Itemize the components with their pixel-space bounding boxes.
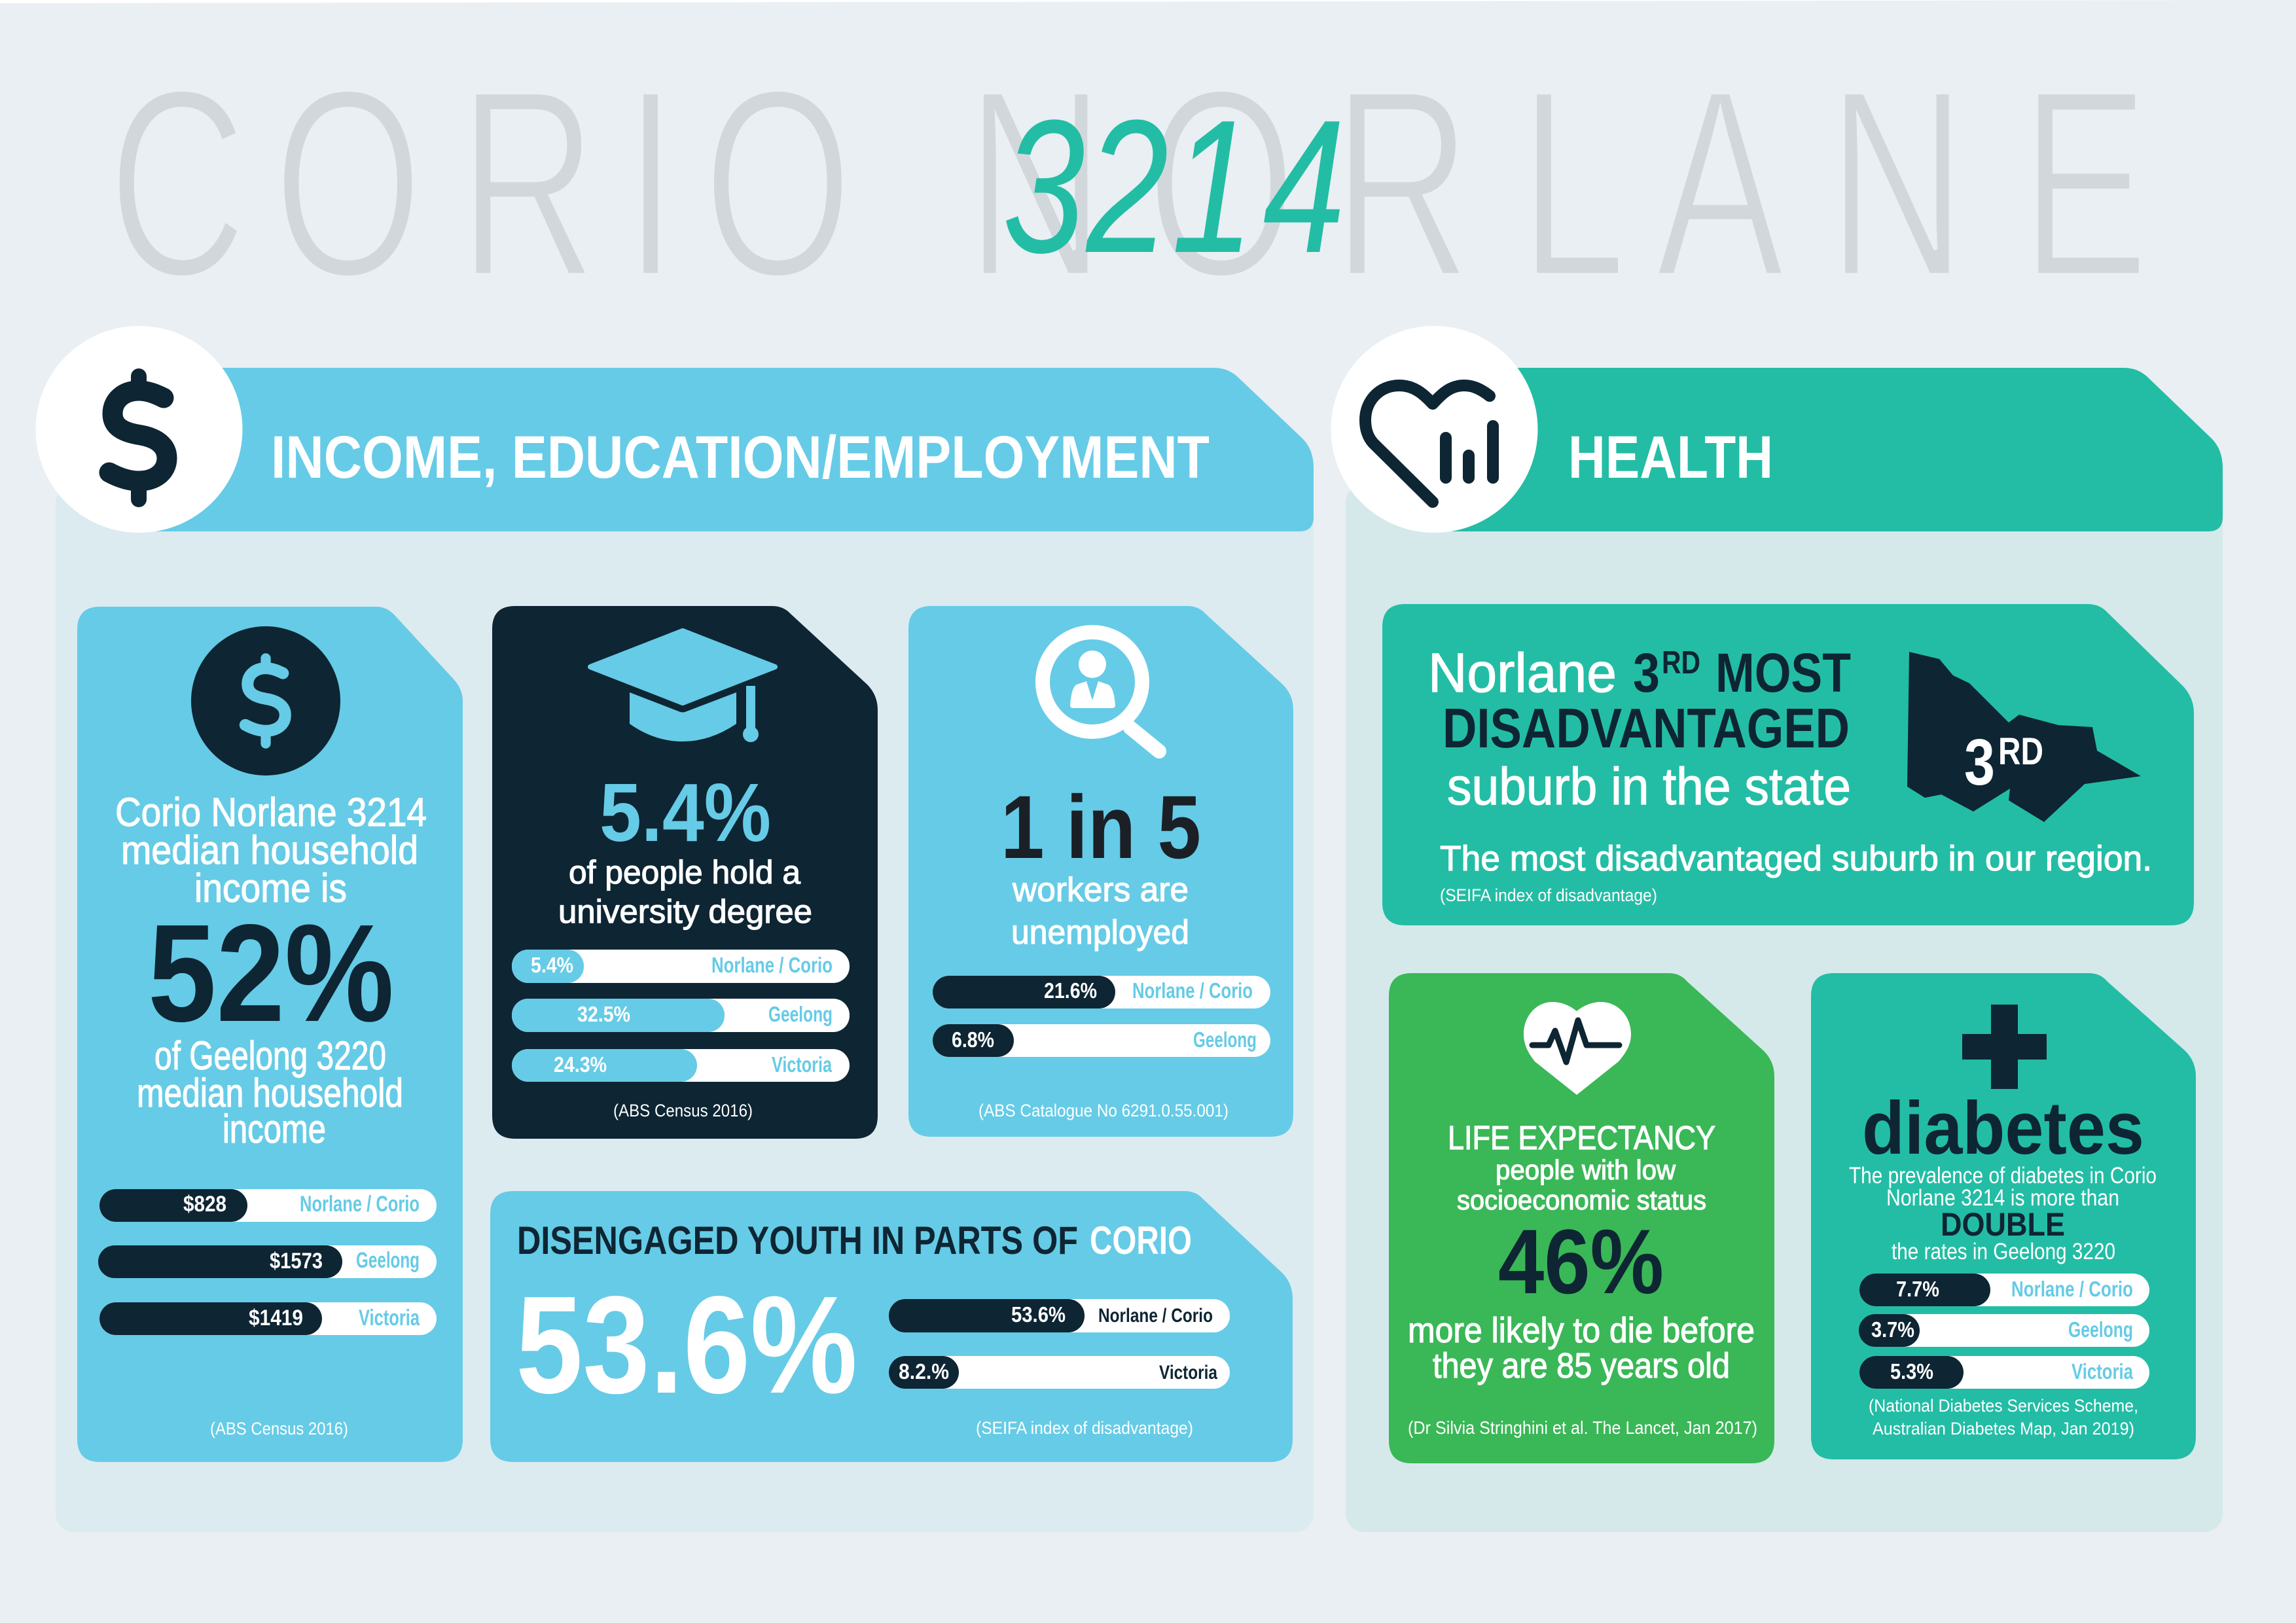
text: university degree: university degree bbox=[558, 893, 812, 930]
stat: 5.4%: 5.4% bbox=[600, 766, 771, 859]
bar chart: diabetes bbox=[1859, 1274, 2149, 1389]
icon: dollar coin bbox=[191, 626, 340, 776]
icon: graduation cap bbox=[590, 631, 775, 742]
stat: 1 in 5: 1 in 5 bbox=[1001, 777, 1201, 878]
bar chart: unemployment: 21.6% bbox=[1044, 978, 1097, 1003]
text: income comparison: of Geelong 3220 bbox=[154, 1033, 386, 1078]
bar chart: income bbox=[98, 1189, 437, 1335]
source: National Diabetes Services Scheme: (National Diabetes Services Scheme, bbox=[1869, 1396, 2138, 1416]
card: life expectancy bbox=[1389, 973, 1774, 1463]
source: National Diabetes Services Scheme: Australian Diabetes Map, Jan 2019) bbox=[1873, 1419, 2134, 1438]
source: The Lancet: (Dr Silvia Stringhini et al. The Lancet, Jan 2017) bbox=[1408, 1418, 1757, 1438]
heading: disengaged youth: CORIO bbox=[1090, 1219, 1192, 1262]
text: life expectancy intro: LIFE EXPECTANCY bbox=[1448, 1119, 1715, 1156]
bar chart: diabetes: 7.7% bbox=[1896, 1277, 1939, 1301]
heading: Norlane 3rd most disadvantaged: MOST bbox=[1715, 642, 1851, 704]
card: unemployment bbox=[908, 606, 1293, 1137]
icon: heart with bars bbox=[1331, 326, 1538, 533]
heading: Norlane 3rd most disadvantaged: DISADVANTAGED bbox=[1443, 698, 1850, 760]
icon: medical cross bbox=[1962, 1005, 2047, 1089]
bar chart: unemployment bbox=[933, 976, 1270, 1057]
map: Victoria with 3rd label: 3 bbox=[1964, 726, 1995, 799]
card: disengaged youth bbox=[490, 1191, 1293, 1462]
heading: diabetes: diabetes bbox=[1862, 1087, 2144, 1170]
card: most disadvantaged suburb bbox=[1382, 604, 2194, 925]
source: SEIFA: (SEIFA index of disadvantage) bbox=[1440, 885, 1657, 905]
text: diabetes prevalence: The prevalence of diabetes in Corio bbox=[1849, 1163, 2157, 1188]
bar chart: diabetes: 5.3% bbox=[1890, 1359, 1933, 1383]
text: diabetes prevalence: Norlane 3214 is more than bbox=[1886, 1185, 2119, 1211]
heading: Norlane 3rd most disadvantaged: Norlane bbox=[1428, 642, 1617, 704]
card: university degree bbox=[492, 606, 878, 1139]
heading: income education employment: INCOME, EDUCATION/EMPLOYMENT bbox=[271, 424, 1210, 491]
postcode 3214: 3214 bbox=[1003, 81, 1346, 293]
heading: health: HEALTH bbox=[1568, 424, 1773, 491]
stat: 46%: 46% bbox=[1498, 1210, 1664, 1313]
bar chart: degree: 32.5% bbox=[577, 1002, 630, 1026]
text: more likely to die: they are 85 years old bbox=[1433, 1346, 1730, 1385]
stat: 52%: 52% bbox=[148, 895, 394, 1050]
bar chart: disengaged youth: Victoria bbox=[1159, 1362, 1217, 1383]
bar chart: disengaged youth bbox=[889, 1299, 1230, 1389]
bar chart: degree: 24.3% bbox=[554, 1052, 607, 1077]
panel: income, education and employment bbox=[35, 326, 1314, 1532]
source: ABS Census: (ABS Census 2016) bbox=[613, 1101, 753, 1120]
bar chart: diabetes: 3.7% bbox=[1871, 1317, 1914, 1342]
stat: 53.6%: 53.6% bbox=[516, 1267, 857, 1422]
header band: health bbox=[1434, 368, 2223, 531]
bar chart: degree: Geelong bbox=[768, 1002, 833, 1026]
text: diabetes prevalence: DOUBLE bbox=[1941, 1206, 2065, 1243]
heading: disengaged youth: DISENGAGED YOUTH IN PARTS OF bbox=[517, 1219, 1078, 1262]
panel: health bbox=[1331, 326, 2223, 1532]
text: income intro bbox=[115, 790, 427, 910]
source: SEIFA: (SEIFA index of disadvantage) bbox=[976, 1418, 1193, 1438]
bar chart: unemployment: Geelong bbox=[1193, 1027, 1257, 1052]
bar chart: income: $828 bbox=[183, 1192, 226, 1217]
bar chart: diabetes: Victoria bbox=[2072, 1359, 2134, 1383]
icon: heart with pulse bbox=[1524, 1002, 1631, 1095]
text: life expectancy intro bbox=[1448, 1119, 1715, 1215]
bar chart: degree: 5.4% bbox=[531, 953, 573, 977]
heading: Norlane 3rd most disadvantaged bbox=[1428, 642, 1851, 815]
bar chart: degree bbox=[512, 950, 850, 1082]
bar chart: diabetes: Norlane / Corio bbox=[2011, 1277, 2133, 1301]
map: Victoria with 3rd label bbox=[1907, 652, 2141, 822]
bar chart: income: Norlane / Corio bbox=[300, 1192, 420, 1217]
bar chart: disengaged youth: Norlane / Corio bbox=[1098, 1305, 1213, 1327]
text: workers are unemployed: workers are bbox=[1012, 871, 1189, 909]
text: workers are unemployed: unemployed bbox=[1011, 914, 1189, 952]
title: Corio Norlane: CORIO NORLANE bbox=[108, 35, 2149, 332]
icon: magnifier with person bbox=[1043, 632, 1159, 751]
bar chart: degree: Victoria bbox=[772, 1052, 832, 1077]
text: university degree: of people hold a bbox=[569, 854, 800, 891]
heading: Norlane 3rd most disadvantaged: 3 bbox=[1633, 642, 1660, 704]
text: most disadvantaged in region: The most disadvantaged suburb in our region. bbox=[1440, 839, 2152, 878]
source: National Diabetes Services Scheme bbox=[1869, 1396, 2138, 1438]
bar chart: unemployment: Norlane / Corio bbox=[1132, 978, 1253, 1003]
text: income intro: income is bbox=[194, 866, 347, 910]
text: more likely to die bbox=[1408, 1311, 1755, 1385]
text: life expectancy intro: people with low bbox=[1496, 1154, 1676, 1185]
bar chart: income: Geelong bbox=[356, 1248, 420, 1273]
text: income comparison bbox=[137, 1033, 403, 1151]
heading: Norlane 3rd most disadvantaged: RD bbox=[1662, 645, 1700, 681]
heading: Norlane 3rd most disadvantaged: suburb in the state bbox=[1447, 757, 1851, 815]
text: income intro: Corio Norlane 3214 bbox=[115, 790, 427, 834]
text: workers are unemployed bbox=[1011, 871, 1189, 952]
text: diabetes prevalence: the rates in Geelong 3220 bbox=[1892, 1239, 2115, 1264]
text: more likely to die: more likely to die before bbox=[1408, 1311, 1755, 1350]
text: income intro: median household bbox=[121, 828, 418, 872]
bar chart: disengaged youth: 53.6% bbox=[1011, 1302, 1066, 1327]
map: Victoria with 3rd label: RD bbox=[1998, 730, 2043, 773]
text: diabetes prevalence bbox=[1849, 1163, 2157, 1264]
bar chart: degree: Norlane / Corio bbox=[711, 953, 833, 977]
text: income comparison: income bbox=[223, 1107, 326, 1151]
bar chart: unemployment: 6.8% bbox=[952, 1027, 994, 1052]
text: income comparison: median household bbox=[137, 1071, 403, 1115]
text: life expectancy intro: socioeconomic status bbox=[1457, 1185, 1706, 1215]
card: median household income bbox=[77, 607, 463, 1462]
bar chart: disengaged youth: 8.2.% bbox=[899, 1359, 949, 1383]
card: diabetes bbox=[1811, 973, 2196, 1459]
header band: income bbox=[139, 368, 1314, 531]
bar chart: income: Victoria bbox=[359, 1306, 420, 1330]
bar chart: diabetes: Geelong bbox=[2068, 1317, 2133, 1342]
source: ABS Catalogue: (ABS Catalogue No 6291.0.55.001) bbox=[978, 1101, 1229, 1120]
source: ABS Census: (ABS Census 2016) bbox=[210, 1419, 348, 1438]
icon: dollar in white circle bbox=[35, 326, 242, 533]
bar chart: income: $1573 bbox=[270, 1249, 323, 1274]
text: university degree bbox=[558, 854, 812, 930]
bar chart: income: $1419 bbox=[249, 1306, 303, 1330]
